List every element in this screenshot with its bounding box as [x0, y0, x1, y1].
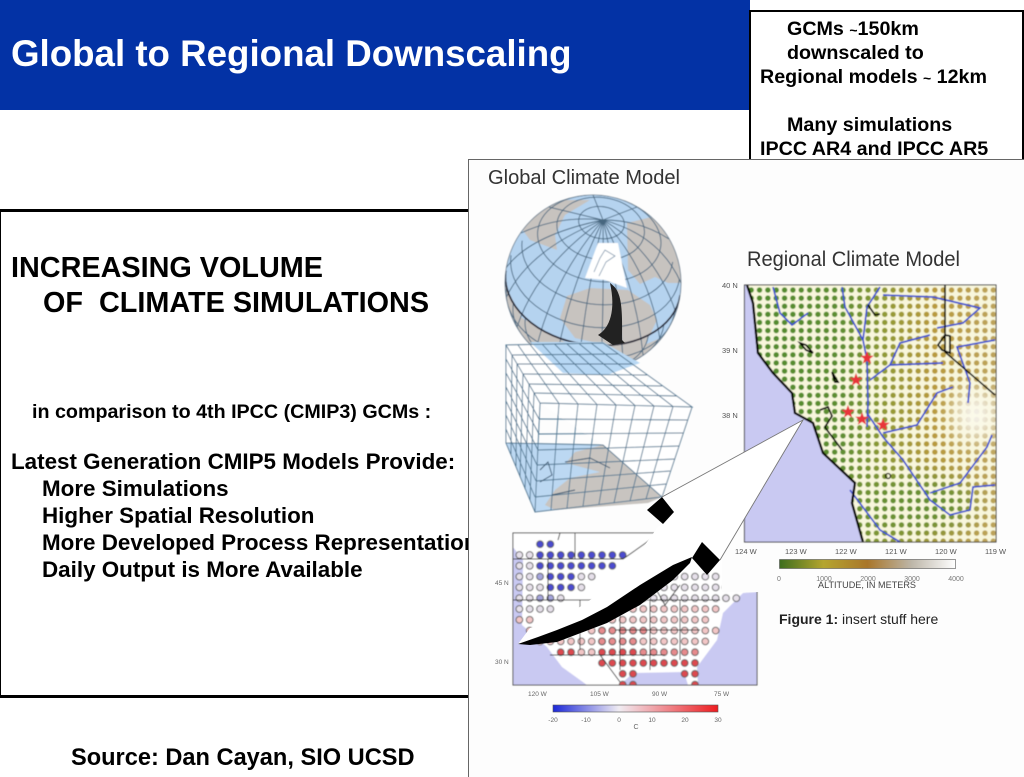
- callout: model resolution box: GCMs ~150km: [787, 18, 919, 40]
- temperature colour bar: [548, 705, 722, 731]
- altitude colour bar: 2000: [860, 576, 876, 583]
- wedge outline: [662, 420, 803, 560]
- callout: model resolution box: Many simulations: [787, 114, 952, 136]
- list of CMIP5 improvements: More Simulations: [42, 476, 229, 501]
- US state borders: [513, 533, 720, 682]
- list of CMIP5 improvements: [11, 449, 478, 582]
- temperature colour bar: 30: [714, 717, 722, 724]
- panel: increasing volume text: [0, 209, 484, 698]
- list of CMIP5 improvements: Latest Generation CMIP5 Models Provide:: [11, 449, 455, 474]
- altitude colour bar: 3000: [904, 576, 920, 583]
- regional map axis labels: [722, 281, 1007, 556]
- temperature colour bar: 10: [648, 717, 656, 724]
- US map axis labels: 45 N: [495, 580, 509, 587]
- heading: INCREASING VOLUME: [11, 252, 323, 284]
- temperature colour bar: -10: [581, 717, 591, 724]
- regional map axis labels: 38 N: [722, 411, 738, 420]
- heading: [11, 252, 429, 319]
- comparison text: in comparison to 4th IPCC (CMIP3) GCMs :: [32, 401, 431, 423]
- arrow: globe to cube: [598, 283, 625, 345]
- figure caption: Figure 1: insert stuff here: [779, 611, 938, 627]
- figure background: [468, 160, 1024, 777]
- regional map axis labels: 119 W: [985, 547, 1007, 556]
- callout: model resolution box: [749, 10, 1024, 174]
- cube base map: [506, 443, 662, 512]
- US map axis labels: [495, 580, 730, 698]
- list of CMIP5 improvements: Higher Spatial Resolution: [42, 503, 314, 528]
- header banner: [0, 0, 750, 110]
- arrow: cube to regional zoom: [518, 420, 803, 645]
- stars: sites: [841, 351, 890, 431]
- heading: regional climate model: Regional Climate Model: [747, 248, 960, 271]
- regional map axis labels: 124 W: [735, 547, 758, 556]
- regional map axis labels: 120 W: [935, 547, 958, 556]
- US dots: [514, 539, 752, 685]
- list of CMIP5 improvements: Daily Output is More Available: [42, 557, 363, 582]
- altitude colour bar: 0: [777, 576, 781, 583]
- callout: model resolution box: Regional models ~ 12km: [760, 66, 987, 88]
- US map axis labels: 105 W: [590, 691, 610, 698]
- arrow white body: [518, 420, 803, 644]
- altitude axis title: ALTITUDE, IN METERS: [818, 580, 916, 591]
- US map axis labels: 30 N: [495, 659, 509, 666]
- chart: regional climate dot map: [744, 285, 997, 542]
- regional map axis labels: 39 N: [722, 346, 738, 355]
- globe parallels: [505, 195, 680, 360]
- panel: downscaling figure: [468, 159, 1024, 777]
- arrow upper barb: [647, 497, 674, 524]
- altitude colour bar: 1000: [816, 576, 832, 583]
- callout: model resolution box: downscaled to: [787, 42, 924, 64]
- globe: [504, 194, 682, 361]
- globe meridians: [506, 195, 681, 371]
- coastline and state border: [747, 285, 995, 542]
- white backing of regional plot: [722, 520, 782, 592]
- rivers: [773, 287, 995, 542]
- US map axis labels: 75 W: [714, 691, 730, 698]
- chart: US temperature dot map: [513, 533, 757, 685]
- globe land masses: [505, 200, 681, 360]
- regional map axis labels: 40 N: [722, 281, 738, 290]
- list of CMIP5 improvements: More Developed Process Representation: [42, 530, 478, 555]
- title: Global to Regional Downscaling: [11, 33, 572, 74]
- US map axis labels: 120 W: [528, 691, 548, 698]
- altitude colour bar: 4000: [948, 576, 964, 583]
- regional map axis labels: 123 W: [785, 547, 808, 556]
- heading: global climate model: Global Climate Model: [488, 167, 680, 189]
- regional map axis labels: 121 W: [885, 547, 908, 556]
- altitude colour bar: [777, 560, 964, 591]
- regional map axis labels: 122 W: [835, 547, 858, 556]
- source credit: Source: Dan Cayan, SIO UCSD: [71, 745, 415, 771]
- globe equator: [504, 270, 680, 346]
- temperature colour bar: -20: [548, 717, 558, 724]
- arrow black underside: [518, 557, 692, 645]
- cube grid: [506, 342, 692, 512]
- arrow lower barb: [692, 542, 720, 575]
- callout: model resolution box: IPCC AR4 and IPCC AR5: [760, 138, 988, 160]
- US map axis labels: 90 W: [652, 691, 668, 698]
- globe selected region: [585, 243, 627, 288]
- temperature colour bar: C: [633, 724, 639, 731]
- temperature colour bar: 0: [617, 717, 621, 724]
- US land: [513, 533, 757, 685]
- temperature colour bar: 20: [681, 717, 689, 724]
- heading: OF CLIMATE SIMULATIONS: [43, 287, 429, 319]
